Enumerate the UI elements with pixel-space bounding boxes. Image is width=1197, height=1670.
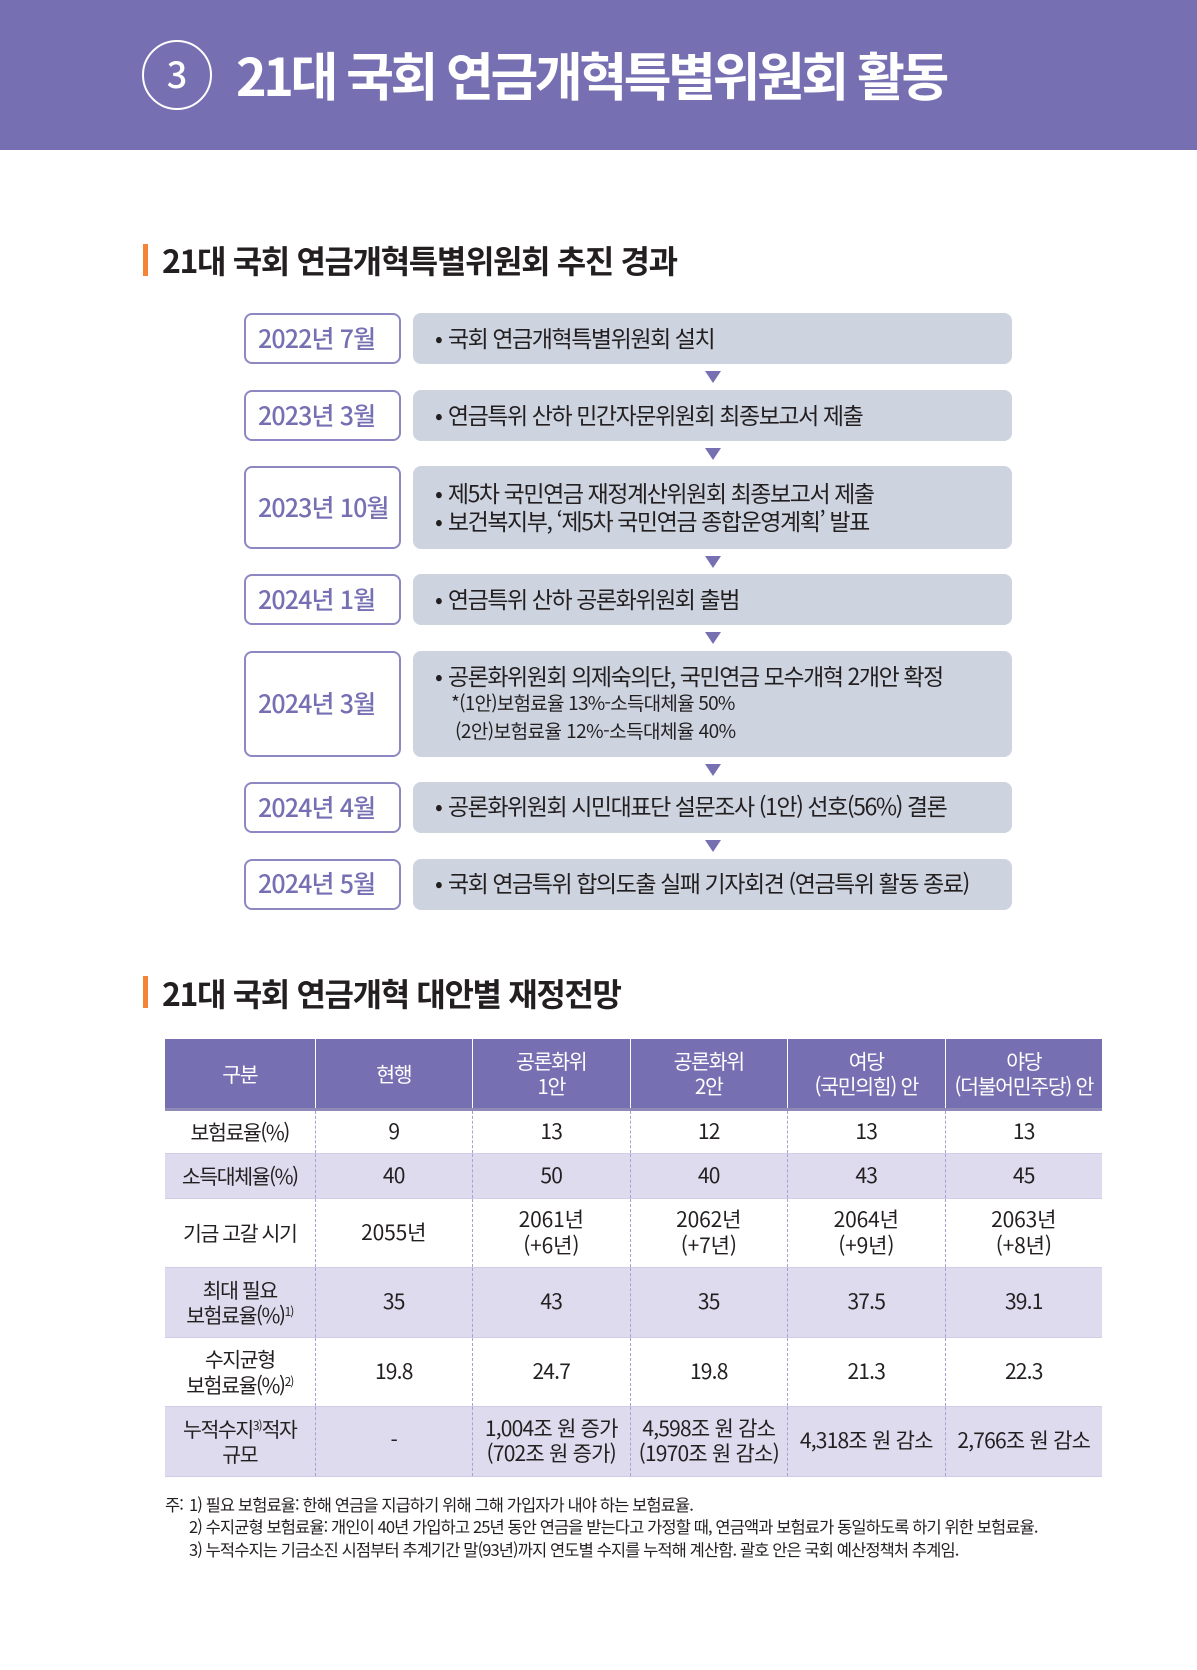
table: fiscal outlook by proposal: 35 [383,1286,405,1316]
event: press conference [413,858,1012,910]
table: fiscal outlook by proposal: 22.3 [1005,1356,1043,1386]
table: fiscal outlook by proposal: 24.7 [532,1356,570,1386]
table: fiscal outlook by proposal: 13 [855,1116,877,1146]
table: fiscal outlook by proposal: 보험료율(%) [191,1116,289,1146]
table: fiscal outlook by proposal: 수지균형 [205,1343,275,1373]
date: 2023년 10월: 2023년 10월 [258,488,389,524]
arrow [705,632,721,644]
table: fiscal outlook by proposal: 19.8 [690,1356,728,1386]
note label: 주: [165,1492,183,1516]
date: 2022년 7월 [244,313,401,364]
event: advisory report: • 연금특위 산하 민간자문위원회 최종보고서 제출 [435,396,862,430]
arrow [705,556,721,568]
event: committee established [413,313,1012,364]
table: fiscal outlook by proposal: 최대 필요 [203,1274,277,1304]
event: fifth recalculation: • 제5차 국민연금 재정계산위원회 최종보고서 제출 [435,474,874,508]
footnotes [165,1492,1038,1561]
heading marker: fiscal outlook [142,976,148,1008]
table: fiscal outlook by proposal: (1970조 원 감소) [639,1438,779,1468]
table: fiscal outlook by proposal: 2061년 [519,1204,584,1234]
date: 2024년 5월: 2024년 5월 [258,865,375,901]
table: fiscal outlook by proposal: - [390,1425,397,1455]
header banner [0,0,1197,150]
date: 2024년 1월 [244,574,401,625]
date: 2024년 3월 [244,651,401,757]
date: 2024년 1월: 2024년 1월 [258,580,375,616]
table: fiscal outlook by proposal: 보험료율(%)1) [186,1299,293,1329]
date: 2024년 4월: 2024년 4월 [258,788,375,824]
table: fiscal outlook by proposal: 13 [1013,1116,1035,1146]
date: 2024년 4월 [244,782,401,833]
table: fiscal outlook by proposal: 43 [540,1286,562,1316]
timeline [244,313,1012,910]
date: 2024년 5월 [244,858,401,910]
note 2: 2) 수지균형 보험료율: 개인이 40년 가입하고 25년 동안 연금을 받는다고 가정할 때, 연금액과 보험료가 동일하도록 하기 위한 보험료율. [189,1514,1038,1538]
note 3: 3) 누적수지는 기금소진 시점부터 추계기간 말(93년)까지 연도별 수지를 누적해 계산함. 괄호 안은 국회 예산정책처 추계임. [189,1537,958,1561]
table: fiscal outlook by proposal: 40 [698,1160,720,1190]
table: fiscal outlook by proposal: 4,598조 원 감소 [642,1412,775,1442]
table: fiscal outlook by proposal: 2,766조 원 감소 [957,1425,1090,1455]
table: fiscal outlook by proposal: 현행 [376,1058,411,1088]
table: fiscal outlook by proposal: (702조 원 증가) [487,1438,616,1468]
table: fiscal outlook by proposal: 야당 [1006,1045,1041,1075]
table: fiscal outlook by proposal: (+9년) [838,1230,894,1260]
table: fiscal outlook by proposal: 구분 [222,1058,257,1088]
table: fiscal outlook by proposal [165,1039,1102,1477]
table: fiscal outlook by proposal: 2062년 [676,1204,741,1234]
arrow [705,448,721,460]
table: fiscal outlook by proposal: 보험료율(%)2) [186,1368,293,1398]
title: 21대 국회 연금개혁특별위원회 활동 [236,36,946,111]
table: fiscal outlook by proposal: 누적수지3)적자 [183,1412,296,1442]
heading: results: 21대 국회 연금개혁특별위원회 추진 경과 [162,237,677,283]
table: fiscal outlook by proposal: 4,318조 원 감소 [800,1425,933,1455]
table: fiscal outlook by proposal: 1,004조 원 증가 [485,1412,618,1442]
table: fiscal outlook by proposal: 소득대체율(%) [182,1160,298,1190]
table: fiscal outlook by proposal: (+8년) [996,1230,1052,1260]
event: fifth recalculation: • 보건복지부, ‘제5차 국민연금 종합운영계획’ 발표 [435,502,869,536]
date: 2023년 3월 [244,390,401,441]
event: two reform options: *(1안)보험료율 13%-소득대체율 50% [451,689,735,716]
table: fiscal outlook by proposal: (국민의힘) 안 [814,1070,918,1100]
date: 2023년 3월: 2023년 3월 [258,396,375,432]
table: fiscal outlook by proposal: 35 [698,1286,720,1316]
event: committee established: • 국회 연금개혁특별위원회 설치 [435,320,714,354]
table: fiscal outlook by proposal: 2063년 [991,1204,1056,1234]
event: deliberation committee launch: • 연금특위 산하 공론화위원회 출범 [435,580,739,614]
arrow [705,764,721,776]
table: fiscal outlook by proposal: (더불어민주당) 안 [954,1070,1093,1100]
event: advisory report [413,390,1012,441]
table: fiscal outlook by proposal: 13 [540,1116,562,1146]
table: fiscal outlook by proposal: 43 [855,1160,877,1190]
table: fiscal outlook by proposal: 기금 고갈 시기 [183,1217,296,1247]
event: two reform options: • 공론화위원회 의제숙의단, 국민연금 모수개혁 2개안 확정 [435,658,943,692]
table: fiscal outlook by proposal: 9 [388,1116,399,1146]
date: 2022년 7월: 2022년 7월 [258,320,375,356]
event: deliberation committee launch [413,574,1012,625]
heading marker: results [142,244,148,276]
table: fiscal outlook by proposal: (+6년) [523,1230,579,1260]
date: 2024년 3월: 2024년 3월 [258,685,375,721]
table: fiscal outlook by proposal: 2055년 [361,1217,426,1247]
table: fiscal outlook by proposal: 2064년 [834,1204,899,1234]
table: fiscal outlook by proposal: 공론화위 [516,1045,586,1075]
table: fiscal outlook by proposal: 40 [383,1160,405,1190]
arrow [705,371,721,383]
arrow [705,840,721,852]
table: fiscal outlook by proposal: (+7년) [681,1230,737,1260]
heading: fiscal outlook: 21대 국회 연금개혁 대안별 재정전망 [162,970,621,1016]
event: two reform options [413,651,1012,757]
event: fifth recalculation [413,466,1012,549]
table: fiscal outlook by proposal: 2안 [695,1070,723,1100]
table: fiscal outlook by proposal: 37.5 [847,1286,885,1316]
table: fiscal outlook by proposal: 규모 [222,1438,257,1468]
table: fiscal outlook by proposal: 여당 [849,1045,884,1075]
table: fiscal outlook by proposal: 12 [698,1116,720,1146]
table: fiscal outlook by proposal: 21.3 [847,1356,885,1386]
event: press conference: • 국회 연금특위 합의도출 실패 기자회견 (연금특위 활동 종료) [435,865,969,899]
table: fiscal outlook by proposal: 45 [1013,1160,1035,1190]
note 1: 1) 필요 보험료율: 한해 연금을 지급하기 위해 그해 가입자가 내야 하는 보험료율. [189,1492,693,1516]
date: 2023년 10월 [244,466,401,549]
table: fiscal outlook by proposal: 공론화위 [674,1045,744,1075]
icon: section number circle: 3 [167,47,187,99]
event: citizen survey: • 공론화위원회 시민대표단 설문조사 (1안) 선호(56%) 결론 [435,788,946,822]
table: fiscal outlook by proposal: 19.8 [375,1356,413,1386]
event: citizen survey [413,782,1012,833]
icon: section number circle [142,40,212,110]
table: fiscal outlook by proposal: 50 [540,1160,562,1190]
table: fiscal outlook by proposal: 1안 [537,1070,565,1100]
table: fiscal outlook by proposal: 39.1 [1005,1286,1043,1316]
event: two reform options: (2안)보험료율 12%-소득대체율 40% [455,717,736,744]
